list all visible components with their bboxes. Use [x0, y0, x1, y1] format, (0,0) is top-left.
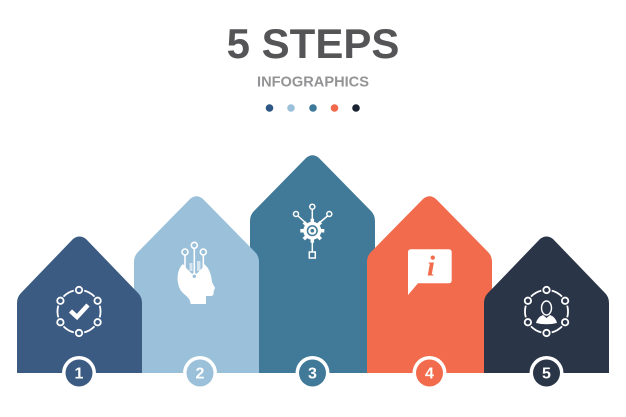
title: 5 STEPS [227, 20, 399, 67]
step number 2 [183, 356, 217, 390]
step number 1 [62, 356, 96, 390]
step number 5: 5 [542, 366, 551, 382]
icon: info speech bubble: i [427, 250, 435, 282]
colour legend dots [266, 104, 360, 112]
panel: step 4 [367, 196, 492, 373]
icon: person in network ring [525, 287, 568, 336]
step number 4: 4 [425, 366, 434, 382]
panel: step 5 [484, 236, 609, 373]
icon: gear with nodes [294, 204, 332, 258]
icon: head with circuit [178, 242, 215, 304]
step number 3 [296, 356, 330, 390]
icon: network ring with check mark [57, 287, 101, 336]
step number 3: 3 [308, 366, 317, 382]
panel: step 1 [17, 236, 142, 373]
step number 1: 1 [75, 366, 84, 382]
subtitle: INFOGRAPHICS [257, 74, 369, 90]
panel: step 3 [250, 155, 375, 373]
icon: info speech bubble [408, 249, 452, 295]
panel: step 2 [134, 196, 259, 373]
step number 2: 2 [196, 366, 205, 382]
step number 4 [412, 356, 446, 390]
step number 5 [530, 356, 564, 390]
